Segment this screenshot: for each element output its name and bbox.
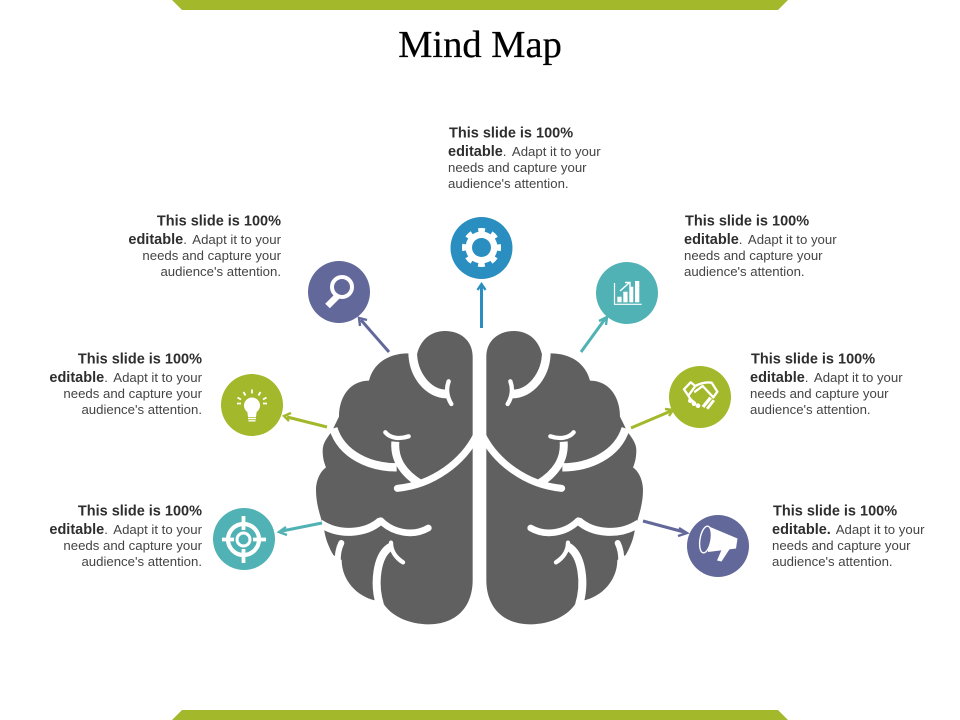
text block: middle right (750, 352, 903, 417)
arrow: brain to handshake (631, 409, 673, 428)
icon: megaphone (687, 515, 749, 577)
arrow: brain to bulb (284, 413, 327, 427)
text block: upper right: needs and capture your (684, 248, 823, 263)
brain (316, 331, 643, 624)
title: Mind Map (398, 24, 562, 66)
text block: upper left: editable. Adapt it to your (128, 232, 282, 248)
text block: upper right: editable. Adapt it to your (684, 232, 837, 248)
text block: upper left: This slide is 100% (157, 214, 281, 230)
text block: top (448, 126, 601, 191)
right hemisphere (482, 331, 643, 624)
arrow: brain to gear (478, 284, 486, 328)
icon: bar chart with arrow (596, 262, 658, 324)
text block: lower left: editable. Adapt it to your (49, 522, 203, 538)
text block: middle left: needs and capture your (63, 386, 203, 401)
bottom banner (172, 710, 788, 720)
icon: light bulb (221, 374, 283, 436)
text block: lower left (49, 504, 203, 569)
text block: lower left: This slide is 100% (78, 504, 202, 520)
text block: upper left (128, 214, 282, 279)
icon: target (213, 508, 275, 570)
icon: gear (450, 217, 512, 279)
text block: upper right (684, 214, 837, 279)
text block: upper left: needs and capture your (142, 248, 282, 263)
text block: top: This slide is 100% (449, 126, 573, 142)
text block: middle left (49, 352, 203, 417)
icon: handshake (669, 366, 731, 428)
left hemisphere (316, 331, 477, 624)
text block: lower left: needs and capture your (63, 538, 203, 553)
arrow: brain to megaphone (643, 521, 687, 536)
text block: top: audience's attention. (448, 176, 569, 191)
arrow: brain to chart (581, 317, 607, 352)
text block: middle left: editable. Adapt it to your (49, 370, 203, 386)
text block: middle right: needs and capture your (750, 386, 889, 401)
text block: middle right: This slide is 100% (751, 352, 875, 368)
text block: top: needs and capture your (448, 160, 587, 175)
text block: upper right: This slide is 100% (685, 214, 809, 230)
text block: upper left: audience's attention. (160, 264, 281, 279)
text block: lower right: needs and capture your (772, 538, 911, 553)
text block: lower right: This slide is 100% (773, 504, 897, 520)
text block: lower left: audience's attention. (81, 554, 202, 569)
arrow: brain to magnifier (359, 318, 389, 352)
text block: lower right (772, 504, 925, 569)
text block: middle right: editable. Adapt it to your (750, 370, 903, 386)
text block: lower right: editable. Adapt it to your (772, 522, 925, 538)
text block: upper right: audience's attention. (684, 264, 805, 279)
text block: top: editable. Adapt it to your (448, 144, 601, 160)
text block: middle left: audience's attention. (81, 402, 202, 417)
text block: lower right: audience's attention. (772, 554, 893, 569)
text block: middle left: This slide is 100% (78, 352, 202, 368)
text block: middle right: audience's attention. (750, 402, 871, 417)
icon: magnifier (308, 261, 370, 323)
arrow: brain to target (279, 523, 322, 535)
top banner (172, 0, 788, 10)
